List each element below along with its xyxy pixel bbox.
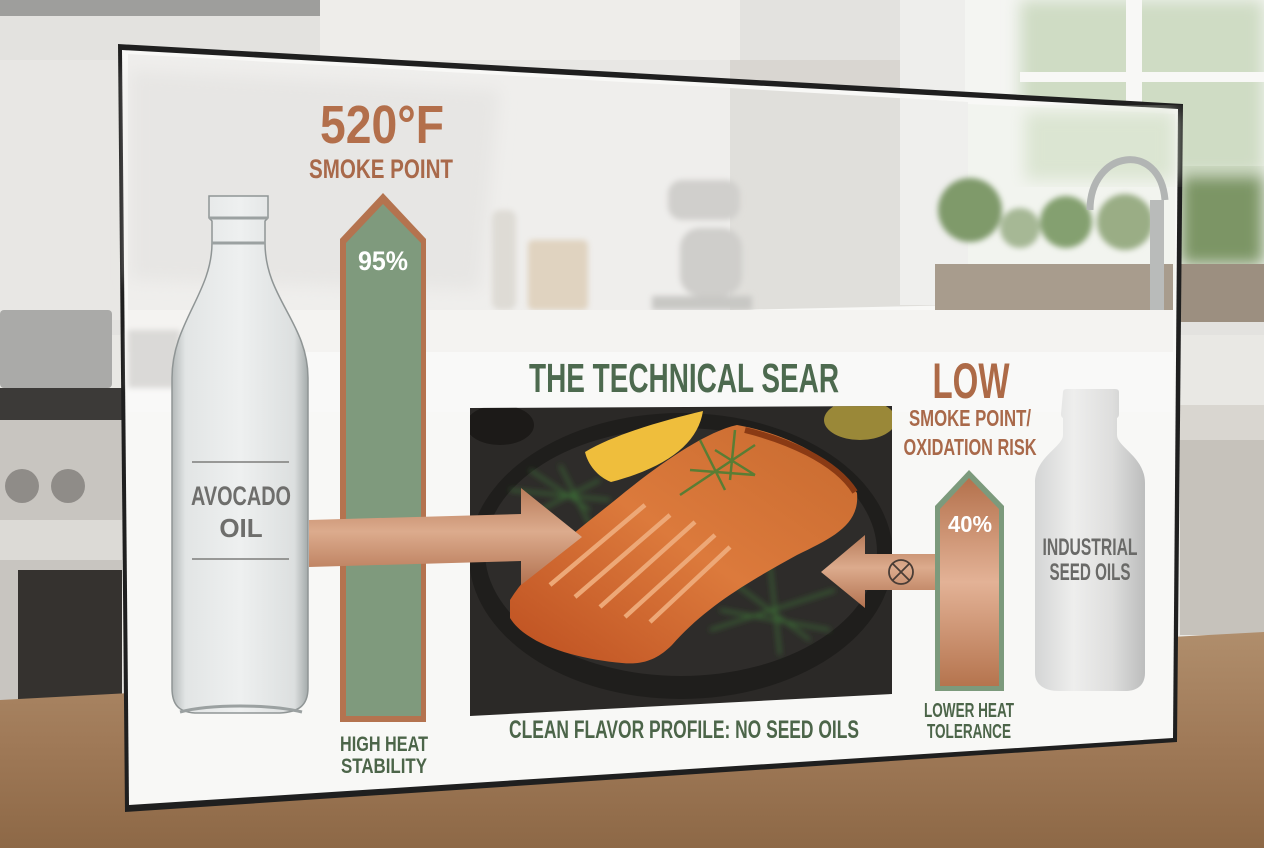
panel: industrial seed oils: [821, 353, 1145, 743]
caption: lower heat tolerance: LOWER HEAT: [924, 700, 1014, 722]
arrow: heat into salmon: [309, 488, 582, 585]
bar: lower heat tolerance: [935, 470, 1004, 691]
bottle label: SEED OILS: [1050, 559, 1130, 586]
dill on top: [680, 430, 755, 495]
bottle label: INDUSTRIAL: [1042, 534, 1138, 561]
arrow: oxidation into salmon: [821, 535, 935, 608]
dill: [510, 465, 835, 655]
panel: avocado oil: [172, 95, 453, 778]
bottle label: [191, 462, 291, 559]
caption: high heat stability: HIGH HEAT: [340, 733, 428, 756]
icon: white plastic bottle: [1035, 389, 1145, 691]
subheading: smoke point oxidation risk: [904, 405, 1037, 460]
caption: lower heat tolerance: [924, 700, 1014, 743]
caption: high heat stability: STABILITY: [341, 755, 427, 778]
caption: lower heat tolerance: TOLERANCE: [927, 721, 1011, 743]
screen panel: [122, 50, 1178, 805]
bottle label: AVOCADO: [191, 481, 291, 511]
bar value: 95%: [358, 246, 408, 276]
bar value: 40%: [948, 511, 992, 537]
subheading: smoke point: SMOKE POINT: [309, 154, 453, 184]
heading: the technical sear: THE TECHNICAL SEAR: [529, 355, 839, 401]
icon: crossed circle: [889, 560, 913, 584]
bottle label: OIL: [219, 513, 263, 543]
photo: seared salmon: [466, 400, 896, 718]
caption: clean flavor profile: CLEAN FLAVOR PROFILE: NO SEED OILS: [509, 716, 859, 744]
lemon: [585, 411, 703, 482]
heading: 520F: 520°F: [320, 95, 444, 155]
screen frame: [118, 44, 1183, 812]
heading: low: LOW: [932, 353, 1010, 409]
bar: high heat stability: [340, 193, 426, 722]
wooden table: [0, 632, 1264, 848]
caption: high heat stability: [340, 733, 428, 778]
icon: glass bottle: [172, 196, 308, 713]
bottle label: [1042, 534, 1138, 586]
salmon fillet: [510, 425, 857, 663]
subheading: smoke point oxidation risk: SMOKE POINT/: [909, 405, 1031, 431]
subheading: smoke point oxidation risk: OXIDATION RISK: [904, 434, 1037, 460]
